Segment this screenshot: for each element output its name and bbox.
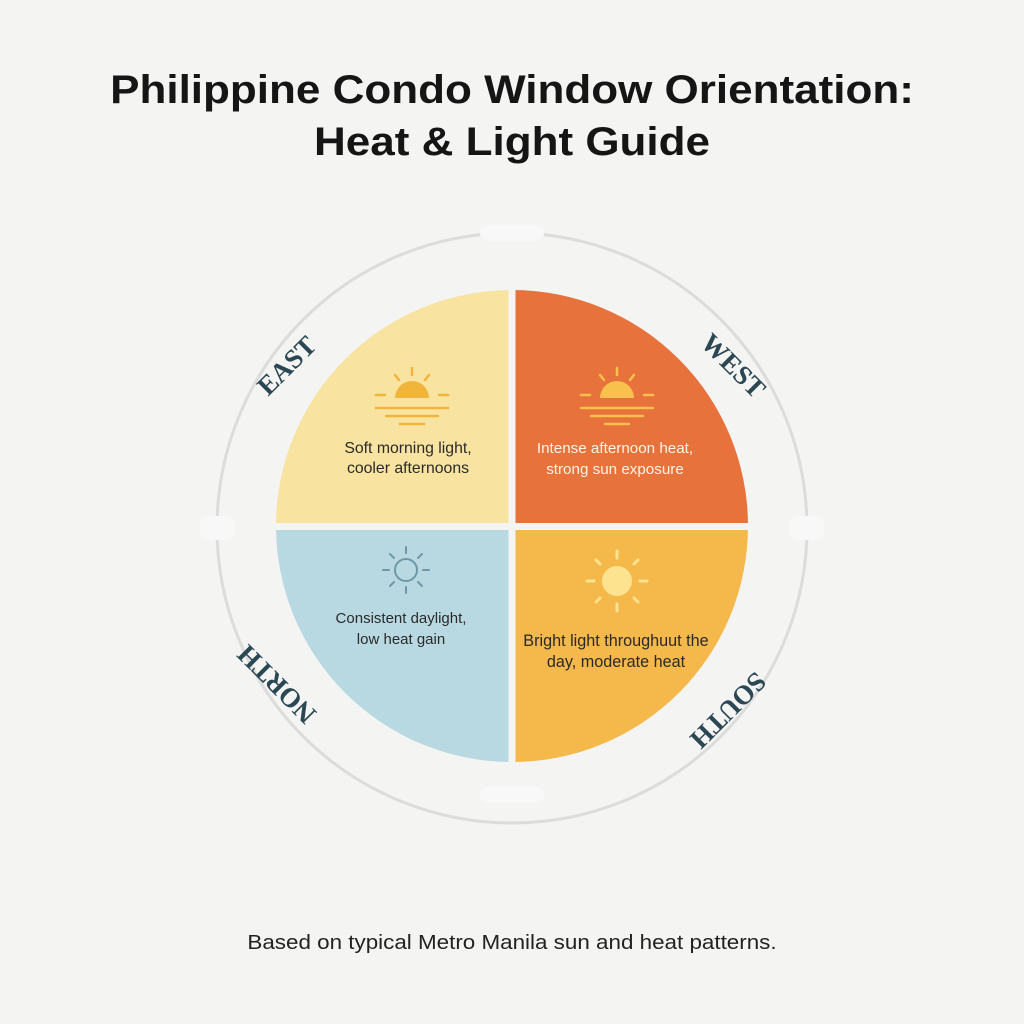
label: south: SOUTH <box>684 666 772 754</box>
icon: bright sun <box>587 551 647 611</box>
text: south: Bright light throughuut the <box>523 632 709 650</box>
label: west: WEST <box>695 327 772 404</box>
icon: sun outline <box>383 547 429 593</box>
text: west: Intense afternoon heat, <box>537 440 693 457</box>
icon: sunset <box>581 368 653 424</box>
label: north: NORTH <box>231 639 322 730</box>
footer note: Based on typical Metro Manila sun and heat patterns. <box>247 932 777 954</box>
text: north: Consistent daylight, <box>336 610 466 627</box>
outer ring <box>200 225 824 823</box>
panel: north <box>270 530 508 770</box>
panel: south <box>516 530 756 770</box>
title: Heat & Light Guide <box>314 120 710 164</box>
label: east: EAST <box>251 330 322 401</box>
compass diagram <box>216 233 808 824</box>
title: Philippine Condo Window Orientation: <box>110 68 914 112</box>
panel: west <box>516 285 756 523</box>
panel: north: low heat gain <box>357 631 445 648</box>
panel: south: day, moderate heat <box>547 653 686 671</box>
panel: east <box>270 285 508 523</box>
icon: sunrise <box>376 368 448 424</box>
panel: east: cooler afternoons <box>347 460 469 477</box>
title <box>110 68 914 164</box>
panel: west: strong sun exposure <box>546 461 684 478</box>
text: east: Soft morning light, <box>344 440 472 457</box>
